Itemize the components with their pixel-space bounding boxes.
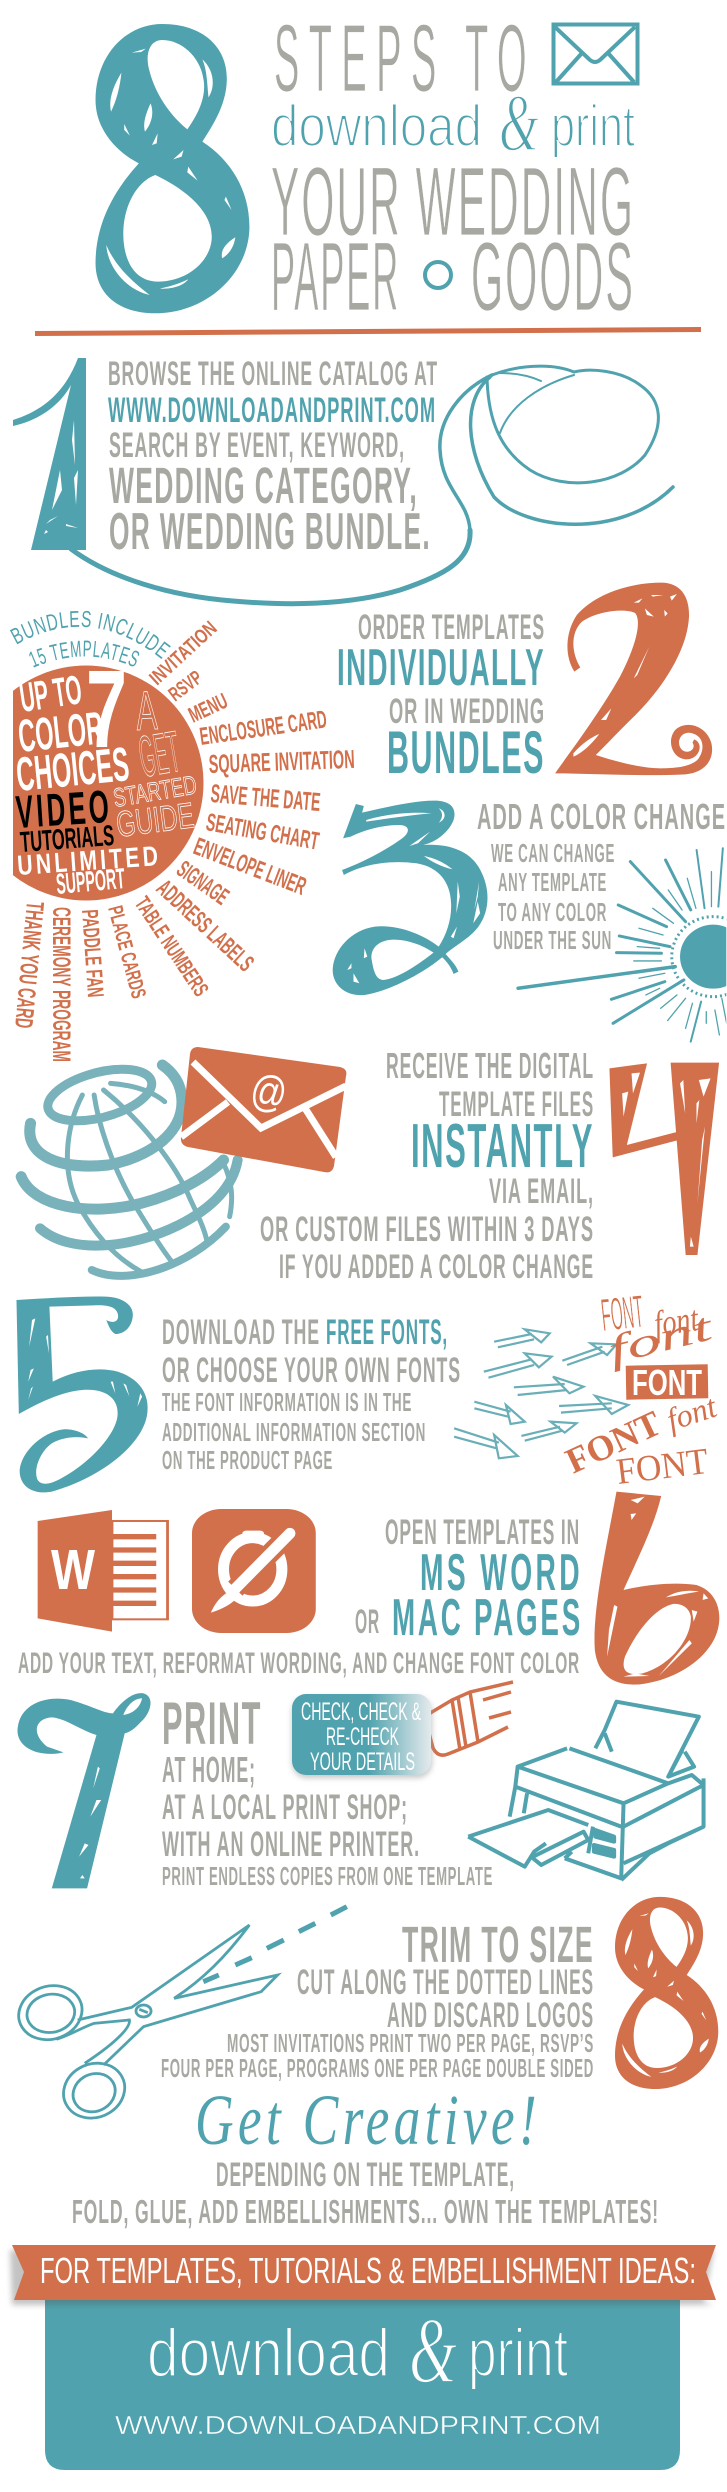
text block: VIA EMAIL,: [489, 1172, 594, 1211]
radial list of templates: SQUARE INVITATION: [208, 744, 355, 779]
logo: download and print: print: [468, 2315, 568, 2391]
text block: [477, 796, 726, 955]
radial list of templates: MENU: [185, 688, 231, 728]
radial list of templates: ENVELOPE LINER: [190, 832, 310, 901]
text block: WWW.DOWNLOADANDPRINT.COM: [108, 391, 436, 430]
badge text: [14, 648, 199, 901]
big numeral 8: [96, 24, 249, 313]
heading: Get Creative!: [195, 2080, 541, 2160]
badge text: UP TO: [17, 666, 85, 721]
radial list of templates: PADDLE FAN: [77, 909, 109, 998]
panel: step 1: [13, 355, 673, 604]
text block: AT A LOCAL PRINT SHOP;: [162, 1788, 408, 1827]
radial list of templates: TABLE NUMBERS: [130, 892, 214, 1001]
swash from numeral to swirl: [71, 366, 673, 604]
panel: step 5: [16, 1285, 722, 1493]
font samples: FONT: [599, 1285, 646, 1341]
text block: ORDER TEMPLATES: [358, 608, 545, 647]
text block: ADDITIONAL INFORMATION SECTION: [162, 1417, 426, 1447]
radial list of templates: SAVE THE DATE: [210, 778, 322, 817]
numeral 5: [16, 1297, 148, 1492]
icon: scissors: [10, 1925, 278, 2122]
logo: download and print: [147, 2299, 568, 2403]
icon: eraser: [426, 1682, 513, 1755]
radial list of templates: INVITATION: [145, 617, 221, 690]
font samples: FONT: [614, 1441, 710, 1493]
numeral 4: [609, 1063, 719, 1255]
panel: step 2: [337, 583, 712, 786]
badge text: VIDEO: [14, 780, 113, 838]
arc heading: bundles include: BUNDLES INCLUDE: [10, 610, 171, 659]
text block: [260, 1045, 594, 1286]
panel: step 8: [10, 1897, 718, 2122]
radial list of templates: ENCLOSURE CARD: [198, 705, 329, 751]
radial list of templates: [9, 617, 355, 1062]
icon: email envelope: [181, 1047, 346, 1172]
callout: check details: [292, 1694, 432, 1778]
radial list of templates: CEREMONY PROGRAM: [47, 907, 75, 1062]
text block: [337, 608, 545, 786]
icon: word document: [38, 1510, 168, 1632]
text block: BUNDLES: [387, 719, 545, 786]
font samples: font: [652, 1298, 701, 1344]
panel: get creative: [72, 2080, 659, 2230]
badge text: TUTORIALS: [19, 820, 115, 859]
text block: OR: [355, 1603, 380, 1641]
text block: [72, 2156, 659, 2230]
footer: [10, 2245, 716, 2470]
icon: globe: [21, 1059, 238, 1276]
logo: download and print: print: [551, 94, 635, 159]
text block: MS WORD: [420, 1544, 583, 1602]
logo: download and print: [271, 77, 635, 168]
badge text: CHOICES: [14, 738, 132, 802]
icon: email envelope: @: [248, 1065, 290, 1119]
logo: download and print: download: [147, 2315, 390, 2391]
text block: WITH AN ONLINE PRINTER.: [162, 1825, 420, 1864]
radial list of templates: THANK YOU CARD: [9, 900, 49, 1030]
radial list of templates: RSVP: [165, 667, 207, 706]
numeral 1: [13, 358, 86, 550]
callout: check details: CHECK, CHECK &: [301, 1698, 421, 1726]
website address: WWW.DOWNLOADANDPRINT.COM: [115, 2410, 601, 2440]
dashed cut line: [203, 1907, 347, 1982]
icon: envelope: [554, 24, 638, 84]
badge text: A: [134, 679, 159, 742]
numeral 7: [17, 1693, 151, 1888]
arrows pointing to fonts: [454, 1329, 628, 1458]
text block: [161, 1916, 594, 2083]
font samples: FONT: [559, 1403, 667, 1481]
badge text: GET: [134, 719, 185, 790]
callout: check details: RE-CHECK: [326, 1723, 399, 1751]
word icon letter: W: [51, 1538, 95, 1602]
panel: step 7: [17, 1682, 704, 1891]
text block: DOWNLOAD THE: [162, 1313, 320, 1352]
text block: WEDDING CATEGORY,: [109, 457, 418, 514]
logo: download and print: &: [409, 2299, 457, 2403]
text block: PRINT: [162, 1690, 262, 1757]
text block: [18, 1513, 583, 1680]
panel: step 4: [21, 1045, 719, 1286]
text block: [162, 1690, 493, 1891]
logo: download and print: download: [271, 94, 482, 159]
badge text: COLOR: [16, 701, 106, 762]
header: PAPER: [271, 222, 400, 331]
numeral 8 orange: [615, 1897, 718, 2089]
font samples: [559, 1285, 722, 1493]
text block: WE CAN CHANGE: [491, 838, 615, 868]
panel: step 6: [18, 1492, 719, 1685]
text block: UNDER THE SUN: [493, 925, 612, 955]
badge text: UNLIMITED: [16, 840, 162, 881]
radial list of templates: ADDRESS LABELS: [151, 875, 259, 977]
text block: ON THE PRODUCT PAGE: [162, 1445, 333, 1475]
callout: check details: YOUR DETAILS: [310, 1748, 415, 1776]
icon: ring bullet: [425, 262, 451, 288]
text block: TO ANY COLOR: [498, 897, 607, 927]
badge: orange circle: [0, 666, 204, 900]
arc heading: 15 templates: 15 TEMPLATES: [29, 640, 140, 668]
icon: pages: [192, 1509, 316, 1633]
numeral 6: [594, 1492, 719, 1685]
radial list of templates: SEATING CHART: [204, 808, 321, 856]
text block: [162, 1313, 461, 1475]
font samples: font: [662, 1388, 722, 1438]
text block: ANY TEMPLATE: [498, 867, 607, 897]
header: [96, 5, 638, 331]
text block: FREE FONTS,: [326, 1313, 448, 1352]
text block: AT HOME;: [162, 1749, 256, 1790]
badge text: 7: [86, 648, 127, 771]
badge text: SUPPORT: [55, 863, 126, 901]
numeral 3: [333, 801, 487, 995]
numeral 2: [555, 583, 712, 775]
text block: THE FONT INFORMATION IS IN THE: [162, 1387, 412, 1417]
text block: SEARCH BY EVENT, KEYWORD,: [109, 426, 405, 465]
logo: download and print: &: [499, 77, 539, 168]
radial list of templates: SIGNAGE: [172, 856, 234, 911]
icon: printer: [468, 1702, 704, 1880]
ribbon shadow: [10, 2250, 714, 2305]
radial list of templates: PLACE CARDS: [103, 903, 150, 1001]
panel: step 3: [333, 796, 727, 1042]
badge text: GUIDE: [114, 794, 196, 845]
panel: teal logo box: [45, 2300, 680, 2470]
font samples: font: [603, 1303, 717, 1373]
text block: OR IN WEDDING: [389, 692, 545, 731]
badge text: STARTED: [111, 769, 199, 813]
ribbon: [12, 2245, 716, 2300]
icon: sun with rays: [518, 848, 727, 1042]
text block: [108, 355, 438, 561]
text block: OR WEDDING BUNDLE.: [109, 503, 431, 561]
text block: INDIVIDUALLY: [337, 639, 545, 697]
panel: bundles sunburst: [9, 610, 396, 1102]
